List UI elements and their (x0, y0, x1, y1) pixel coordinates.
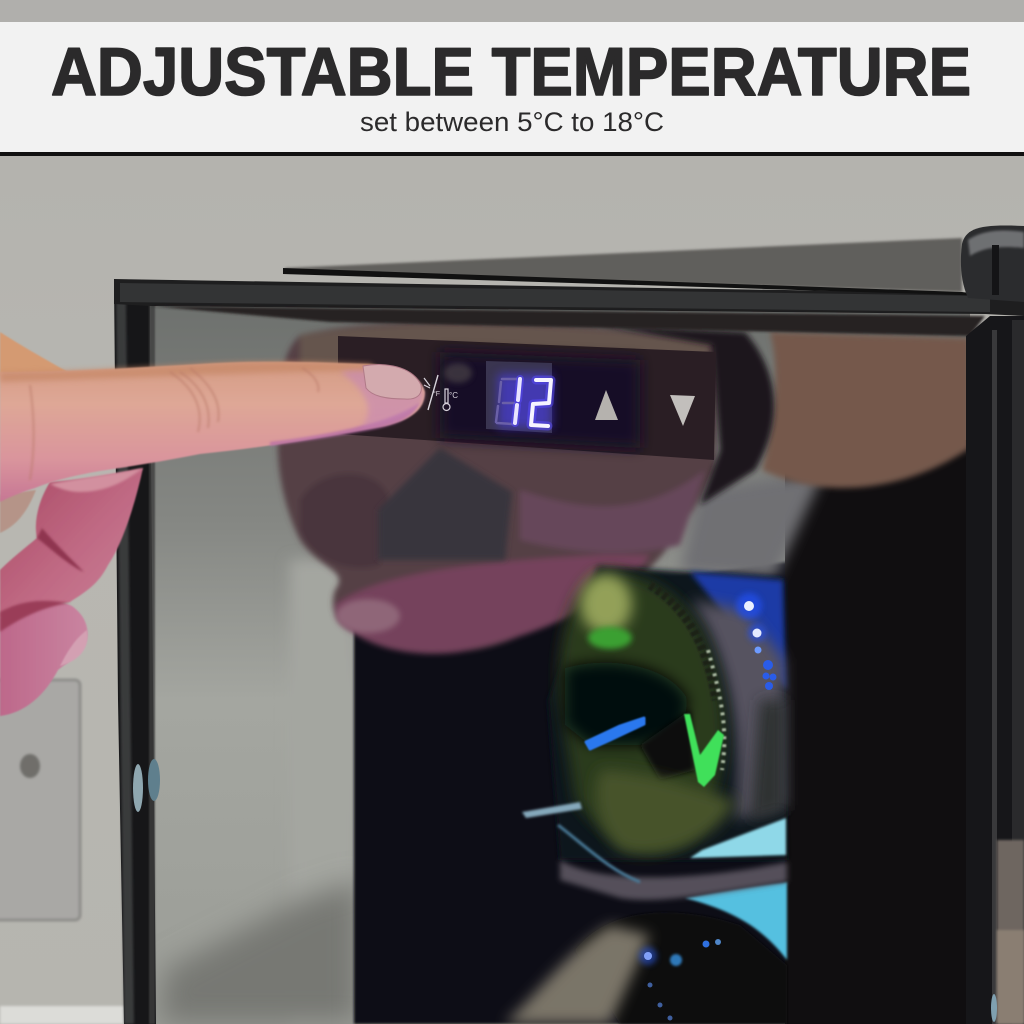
top right hinge (961, 226, 1024, 302)
reflected pentagon shadow (378, 448, 512, 560)
appliance shadow on wall (285, 238, 962, 292)
reflected hand (278, 321, 720, 654)
panel sensor glare (444, 363, 472, 383)
palm sliver (0, 490, 36, 533)
blue LED dots (736, 593, 776, 690)
temperature unit icon (424, 375, 458, 410)
title: ADJUSTABLE TEMPERATURE (51, 34, 971, 110)
bottom fingernail (60, 630, 88, 666)
fingertip tint (270, 402, 420, 446)
middle knuckle crease (37, 528, 84, 572)
bottle dark core (565, 663, 688, 745)
reflected watch (600, 325, 774, 505)
index finger (0, 362, 425, 502)
glass door (150, 305, 970, 1024)
finger top tan (0, 362, 372, 382)
banner rule (0, 152, 1024, 156)
blue LED streak (586, 718, 644, 749)
dark interior reflection (354, 560, 800, 1024)
banner background (0, 22, 1024, 152)
bottle blue edge (690, 572, 786, 690)
top strip (0, 0, 1024, 22)
top rear lip (283, 268, 992, 296)
down arrow button (670, 395, 695, 426)
olive lower rim (596, 770, 735, 853)
fingernail (363, 365, 421, 399)
glass left pane reflection (150, 305, 970, 1024)
right vertical frame (966, 316, 1024, 1024)
finger fold highlight (50, 468, 143, 492)
green glass rim (559, 572, 724, 851)
wall socket plate (0, 680, 80, 920)
dark lower bottle (560, 860, 787, 900)
palm top (0, 332, 68, 376)
pointing hand (0, 332, 425, 716)
LED glow (498, 374, 552, 428)
subtitle: set between 5°C to 18°C (360, 107, 664, 137)
title banner (0, 22, 1024, 156)
shadow between fingers (0, 601, 70, 632)
bottle cyan highlights (690, 818, 786, 858)
knuckle wrinkles (30, 368, 318, 480)
control panel (338, 336, 716, 460)
top frame (114, 279, 1024, 316)
bottle grey side (690, 600, 785, 820)
reflected arm (762, 332, 970, 488)
countertop edge (0, 1006, 130, 1024)
bottom finger (0, 602, 87, 716)
panel background (338, 336, 716, 460)
bottle reflection (505, 566, 787, 1024)
light strip beside hand (680, 470, 825, 578)
hinge screw (133, 764, 143, 812)
up arrow button (595, 390, 618, 420)
temperature unit icon: °F (433, 390, 440, 398)
reflected thumbnail (336, 599, 400, 633)
LED display window (486, 361, 552, 433)
pale glare on rim (580, 574, 632, 634)
right dark area (785, 440, 970, 1024)
lower curled fingers (0, 468, 143, 618)
temperature unit icon: °C (449, 391, 458, 400)
LED digits: 12 (496, 379, 551, 426)
green V highlight (684, 714, 724, 787)
glass band beside interior (290, 560, 354, 1024)
bottle base panel (548, 566, 787, 860)
door frame (114, 226, 1024, 1024)
left vertical frame (114, 280, 156, 1024)
